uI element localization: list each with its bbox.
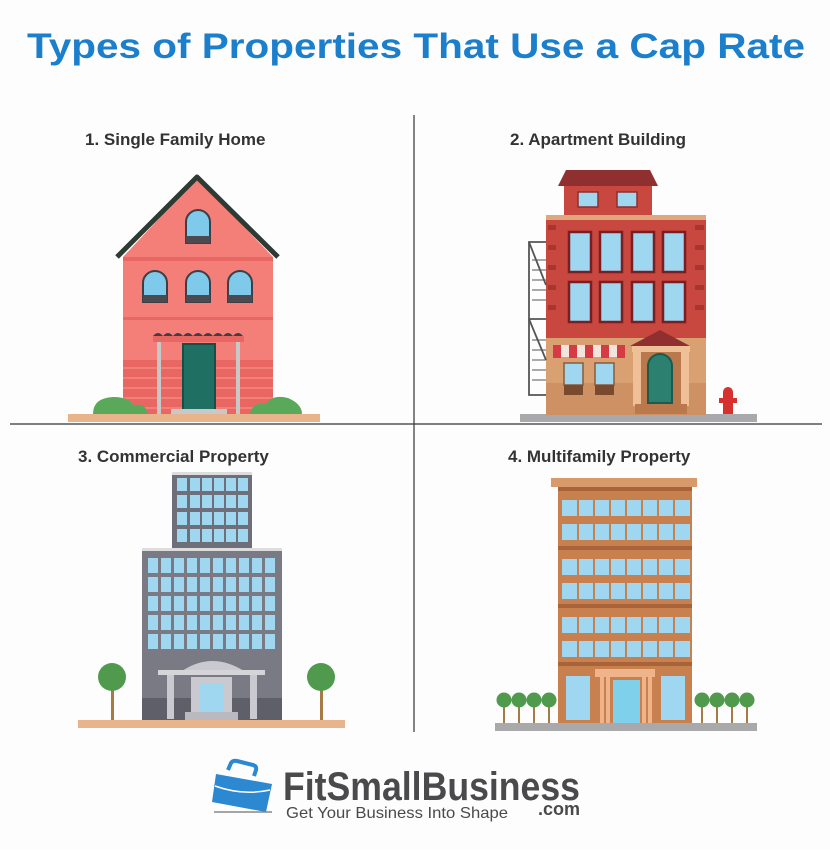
logo xyxy=(212,761,580,822)
heading 4: 4. Multifamily Property xyxy=(508,447,691,466)
heading 2: 2. Apartment Building xyxy=(510,130,686,149)
apartment building xyxy=(520,170,757,422)
house: single family xyxy=(68,177,320,422)
heading 1: 1. Single Family Home xyxy=(85,130,265,149)
heading 3: 3. Commercial Property xyxy=(78,447,269,466)
logo: .com xyxy=(538,799,580,819)
title: Types of Properties That Use a Cap Rate xyxy=(27,27,805,66)
multifamily property xyxy=(495,478,757,731)
logo: Get Your Business Into Shape xyxy=(286,805,508,822)
icon: briefcase xyxy=(212,761,272,812)
commercial property xyxy=(78,472,345,728)
logo: FitSmallBusiness xyxy=(283,765,580,809)
